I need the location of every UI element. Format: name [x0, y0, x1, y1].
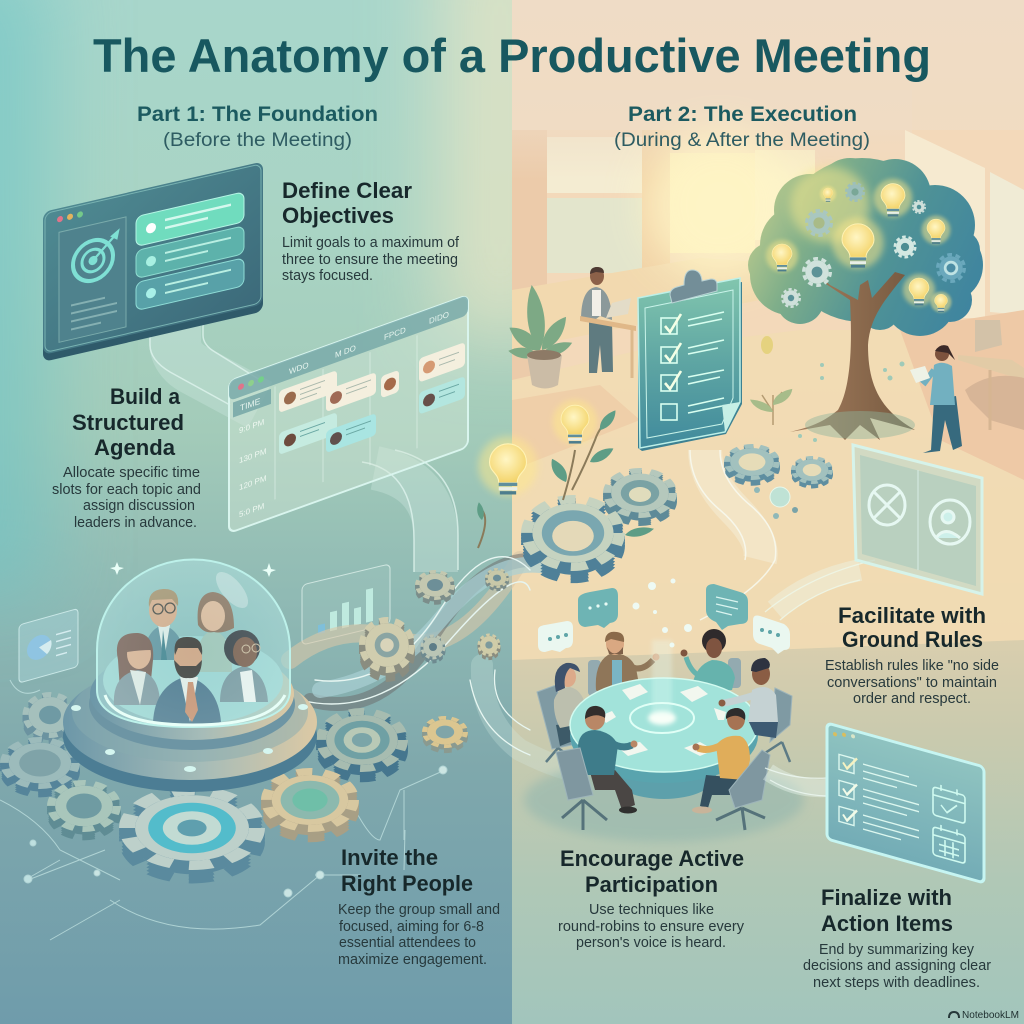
- stage platform: [63, 636, 317, 792]
- window dots: [57, 211, 83, 223]
- part 1 heading: Part 1: The Foundation: [137, 103, 378, 126]
- part 1 heading: [137, 103, 378, 151]
- canopy: [748, 158, 983, 336]
- person: man with glasses: [143, 589, 186, 660]
- heading: encourage participation: Use techniques like: [589, 902, 714, 918]
- back chairs: [537, 658, 792, 762]
- speech bubbles: [538, 584, 790, 654]
- platform lights: [71, 704, 308, 772]
- heading: facilitate with ground rules: [825, 603, 999, 707]
- heading: facilitate with ground rules: conversations" to maintain: [827, 675, 997, 691]
- heading: build a structured agenda: [52, 384, 201, 531]
- woman left: [554, 663, 590, 746]
- ground rules tablet: [853, 445, 982, 594]
- icon: no side talk: [869, 485, 905, 525]
- person: bearded man in suit: [153, 637, 221, 726]
- calendar entries: [279, 324, 465, 470]
- center gears: [527, 446, 831, 579]
- table: [570, 640, 758, 799]
- heading: build a structured agenda: Structured: [72, 410, 184, 435]
- heading: define clear objectives: Limit goals to a maximum of: [282, 235, 459, 251]
- calendar header: M DO: [335, 343, 356, 360]
- heading: build a structured agenda: assign discussion: [83, 498, 195, 514]
- part 2 heading: (During & After the Meeting): [614, 130, 870, 151]
- man in brown jacket: [596, 632, 660, 695]
- heading: facilitate with ground rules: Ground Rules: [842, 627, 983, 652]
- heading: encourage participation: Encourage Active: [560, 846, 744, 871]
- circuit lines: [0, 680, 447, 940]
- heading: build a structured agenda: leaders in advance.: [74, 515, 197, 531]
- window dots: [833, 729, 855, 742]
- woman in teal: [680, 629, 735, 692]
- heading: finalize action items: Finalize with: [821, 885, 952, 910]
- person with laptop at desk: [580, 267, 636, 378]
- part 2 heading: [614, 103, 870, 151]
- time labels: 120 PM: [239, 474, 267, 492]
- small orb: [754, 487, 798, 519]
- twisted ribbons: [290, 557, 575, 770]
- time labels: [239, 417, 267, 519]
- check items: [661, 312, 724, 420]
- office scene background: [512, 90, 1024, 660]
- heading: build a structured agenda: Build a: [110, 384, 181, 409]
- heading: facilitate with ground rules: Facilitate with: [838, 603, 986, 628]
- person: woman with brown hair: [196, 592, 234, 672]
- heading: define clear objectives: Objectives: [282, 203, 394, 228]
- flow from ground rules tablet: [765, 560, 875, 620]
- sparkles: [110, 562, 276, 577]
- trunk and roots: [790, 268, 915, 440]
- heading: finalize action items: decisions and assigning clear: [803, 958, 991, 974]
- person reading tablet: [910, 345, 962, 453]
- heading: facilitate with ground rules: order and respect.: [853, 691, 971, 707]
- sapling and falling leaves: [747, 336, 904, 442]
- person: woman in gray: [114, 633, 160, 705]
- title: The Anatomy of a Productive Meeting: [93, 29, 931, 82]
- objective list items: [136, 192, 244, 311]
- man front right: [692, 708, 770, 830]
- clipboard: [638, 270, 742, 451]
- calendar icons: [933, 783, 965, 864]
- time labels: 130 PM: [239, 447, 267, 465]
- man right: [718, 658, 778, 738]
- gears cluster left: [4, 695, 465, 879]
- desk and chair at right: [958, 320, 1024, 430]
- heading: encourage participation: [558, 846, 745, 951]
- heading: invite the right people: [338, 845, 500, 968]
- chart card: [302, 564, 390, 645]
- data flow ribbons left: [150, 305, 458, 572]
- part 2 heading: Part 2: The Execution: [628, 103, 857, 126]
- dome interior: [97, 560, 290, 727]
- heading: encourage participation: person's voice is heard.: [576, 935, 726, 951]
- flow from clipboard: [690, 450, 776, 620]
- man front left: [556, 706, 638, 830]
- heading: finalize action items: next steps with deadlines.: [813, 975, 980, 991]
- flow to action items: [765, 768, 827, 796]
- heading: define clear objectives: Define Clear: [282, 178, 412, 203]
- small ribbon gears: [362, 569, 508, 679]
- bulbs and sprout: [476, 400, 655, 548]
- person: dark skinned woman: [220, 630, 268, 702]
- heading: encourage participation: Participation: [585, 872, 718, 897]
- connector stem: [190, 760, 194, 785]
- heading: invite the right people: Invite the: [341, 845, 438, 870]
- heading: define clear objectives: stays focused.: [282, 268, 373, 284]
- NotebookLM mark: NotebookLM: [962, 1010, 1019, 1021]
- checklist: [839, 753, 919, 845]
- target icon: [73, 230, 119, 285]
- calendar header: WDO: [289, 360, 309, 376]
- calendar header: FPCD: [384, 326, 406, 342]
- clip: [670, 270, 717, 303]
- icon: person: [930, 500, 970, 544]
- heading: invite the right people: focused, aiming for 6-8: [339, 919, 484, 935]
- time labels: 9:0 PM: [239, 417, 264, 435]
- heading: finalize action items: Action Items: [821, 911, 953, 936]
- part 1 heading: (Before the Meeting): [163, 130, 352, 151]
- heading: facilitate with ground rules: Establish rules like "no side: [825, 658, 999, 674]
- left background panel: [0, 0, 560, 1024]
- calendar header: DIDO: [429, 310, 450, 326]
- heading: build a structured agenda: Agenda: [94, 435, 176, 460]
- time labels: 5:0 PM: [239, 501, 264, 519]
- tree gears: [782, 183, 964, 307]
- meeting scene: [524, 578, 804, 842]
- glass dome with team: [97, 560, 290, 727]
- glass dome: [97, 560, 290, 727]
- heading: build a structured agenda: Allocate specific time: [63, 465, 200, 481]
- pie card: [19, 608, 78, 683]
- heading: define clear objectives: [282, 178, 459, 284]
- potted plant: [506, 283, 574, 388]
- heading: encourage participation: round-robins to ensure every: [558, 919, 745, 935]
- heading: finalize action items: [803, 885, 991, 991]
- heading: finalize action items: End by summarizing key: [819, 942, 975, 958]
- calendar header: TIME: [240, 396, 260, 413]
- floating particles: [632, 578, 692, 648]
- heading: invite the right people: maximize engagement.: [338, 952, 487, 968]
- heading: invite the right people: Right People: [341, 871, 473, 896]
- heading: invite the right people: Keep the group small and: [338, 902, 500, 918]
- calendar header: [233, 309, 450, 418]
- heading: invite the right people: essential attendees to: [339, 935, 476, 951]
- action items window: [827, 723, 984, 883]
- screen: clear objectives: [43, 161, 263, 362]
- heading: build a structured agenda: slots for each topic and: [52, 482, 201, 498]
- right background panel: [512, 0, 1024, 1024]
- tree bulbs: [766, 179, 951, 312]
- heading: define clear objectives: three to ensure the meeting: [282, 252, 458, 268]
- screen: agenda calendar: [229, 295, 468, 533]
- tree: [748, 158, 983, 440]
- papers: [600, 684, 726, 756]
